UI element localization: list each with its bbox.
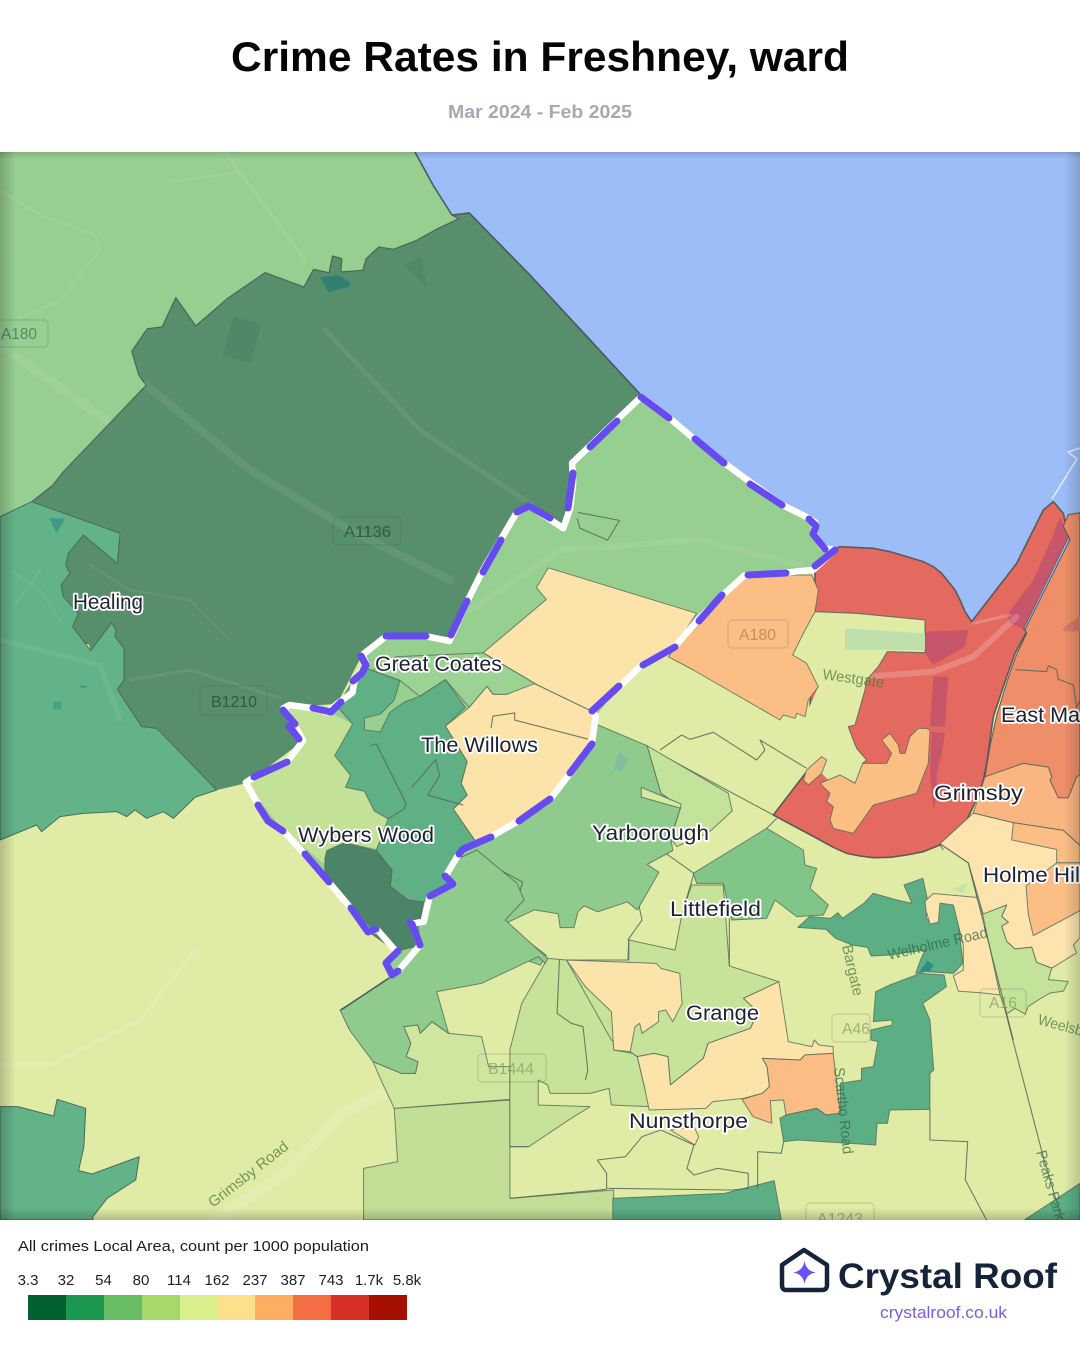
area: Yarborough mid green: [416, 724, 733, 966]
ward area: darkest green: [325, 843, 424, 951]
street: Grimsby Road: Grimsby Road: [205, 1138, 292, 1211]
street: Peaks Parkway: Peaks Park: [1032, 1148, 1068, 1223]
place: Nunsthorpe: Nunsthorpe: [629, 1110, 748, 1133]
area: red central Grimsby: [640, 502, 1068, 920]
street: Scartho Road: Scartho Road: [830, 1067, 856, 1155]
place: Wybers Wood: Wybers Wood: [298, 824, 434, 847]
area: south-west mid green: [340, 850, 548, 1073]
area: dark green rural region: [31, 212, 640, 644]
place: Littlefield: Littlefield: [670, 898, 761, 921]
street: Bargate: Bargate: [838, 943, 866, 998]
label: B1444: B1444: [488, 1061, 534, 1078]
label: A180 east: A180: [739, 627, 776, 644]
area: south block: [364, 853, 1080, 1220]
legend values: 114: [167, 1272, 191, 1289]
road labels: [0, 320, 1080, 1231]
place: Yarborough: Yarborough: [592, 822, 709, 845]
label: A46: A46: [842, 1021, 870, 1038]
place: Grange: Grange: [686, 1002, 759, 1025]
area: Holme Hill orange: [1012, 823, 1080, 863]
street: Welholme Road: Welholme Road: [886, 924, 989, 964]
road: A180 through ward: [470, 540, 800, 610]
area: Welholme peach: [925, 894, 1000, 995]
area: Grange peach south: [637, 982, 833, 1110]
area: B1444 estate: [373, 1022, 510, 1108]
legend values: 743: [318, 1272, 344, 1289]
legend values: 1.7k: [355, 1272, 384, 1289]
legend values: 5.8k: [393, 1272, 422, 1289]
legend values: 3.3: [18, 1272, 38, 1289]
label: B1210: B1210: [211, 694, 257, 711]
roads: Healing: [0, 570, 120, 720]
area: teal Welholme: [798, 878, 963, 973]
legend values: 162: [204, 1272, 230, 1289]
legend colour scale: [28, 1295, 407, 1320]
ward area: Great Coates green: [372, 653, 536, 707]
legend: [18, 1238, 422, 1320]
place labels: [73, 591, 1080, 1133]
road: Grimsby Road: [215, 1090, 390, 1220]
area: teal Scartho Road: [780, 973, 946, 1145]
sea: [415, 152, 1080, 640]
legend values: 54: [95, 1272, 112, 1289]
area: Grange peach north: [567, 960, 682, 1052]
coast lines: [415, 152, 640, 394]
roads: dark region: [90, 330, 525, 698]
place: East Marsh: East Ma: [1001, 704, 1080, 727]
area: Holme Hill peach: [940, 813, 1080, 968]
subtitle: date range: Mar 2024 - Feb 2025: [448, 101, 632, 122]
dark red rail and industrial strips: [925, 630, 968, 665]
legend values: 387: [280, 1272, 306, 1289]
ward area: pale Wybers Wood: [246, 706, 388, 864]
place: Great Coates: Great Coates: [375, 653, 502, 676]
area: north-west farmland: [0, 152, 456, 516]
ward boundary: white line: [246, 397, 835, 975]
area: Westgate pale region: [806, 612, 925, 782]
ward area: The Willows green: [335, 667, 475, 902]
area: orange Scartho: [742, 1053, 840, 1123]
boundary lines Westgate: [640, 732, 943, 850]
logo: Crystal Roof: [782, 1250, 1057, 1322]
legend values: 237: [242, 1272, 268, 1289]
area: pale green Littlefield: [693, 828, 828, 920]
title: Crime Rates in Freshney, ward: [231, 33, 849, 80]
area: Grange and west columns: [510, 958, 649, 1147]
ward boundary: purple dashes: [254, 397, 835, 975]
legend title: All crimes Local Area, count per 1000 population: [18, 1238, 369, 1255]
area: teal south strip: [613, 1181, 781, 1220]
label: A1136: A1136: [344, 524, 391, 541]
place: Holme Hill: Holme Hil: [983, 864, 1080, 887]
ward area: peach north: [483, 568, 697, 711]
legend values: [18, 1272, 422, 1289]
choropleth map: [0, 152, 1080, 1231]
area: east Grimsby: [925, 513, 1080, 1040]
place: The Willows: The Willows: [421, 734, 538, 757]
area: orange A180: [668, 575, 818, 720]
area: orange central: [820, 728, 930, 833]
area: lake and fields: [224, 275, 427, 364]
ward area: peach The Willows: [445, 684, 596, 841]
area: Healing green region: [0, 502, 217, 840]
roads: north-west: [236, 170, 242, 174]
website url: crystalroof.co.uk: [880, 1304, 1008, 1322]
label: A16: A16: [989, 995, 1017, 1012]
icon: house with star: [782, 1250, 827, 1290]
area: dark green south block: [88, 524, 506, 790]
pier: [1052, 448, 1080, 499]
logo wordmark: Crystal Roof: [838, 1257, 1057, 1296]
place: Healing: Healing: [73, 591, 143, 614]
legend values: 32: [58, 1272, 74, 1289]
area: bottom-left green estate: [0, 1099, 139, 1220]
south boundary lines: [510, 853, 1062, 1220]
area: pale green north of Yarborough: [647, 746, 732, 847]
legend values: 80: [133, 1272, 149, 1289]
area: orange East Marsh south: [973, 763, 1080, 846]
street: Westgate: Westgate: [821, 666, 885, 692]
place: Grimsby: Grimsby: [934, 782, 1024, 805]
area: pale green A16: [982, 905, 1068, 1014]
label: A1243: A1243: [817, 1211, 863, 1228]
ward: Freshney interior: [246, 397, 835, 975]
pale park: [952, 882, 968, 894]
label: A180 west: A180: [1, 326, 37, 343]
